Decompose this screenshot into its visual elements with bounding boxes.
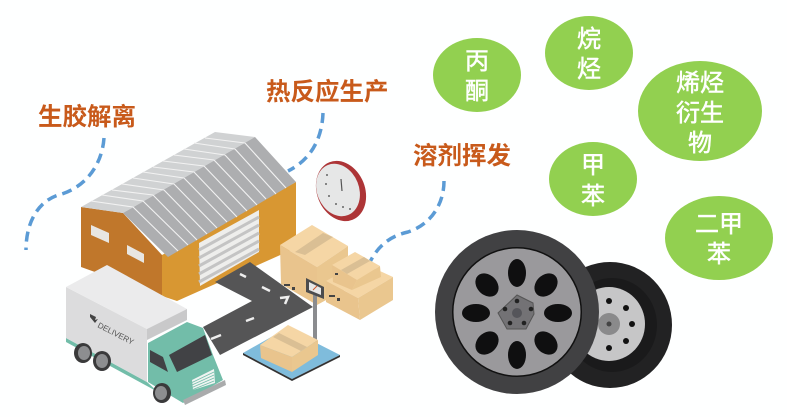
bubble: acetone: 丙	[465, 48, 489, 75]
lower right box	[326, 262, 393, 320]
bubble: olefin derivatives: 烯烃	[676, 70, 724, 97]
bubble: xylene: 二甲	[695, 211, 743, 238]
dashed arrow: solvent evaporation	[370, 181, 444, 262]
bubble: toluene: 甲	[581, 152, 605, 179]
bubble: olefin derivatives	[638, 61, 762, 161]
warehouse side roof	[81, 132, 255, 213]
platform scale	[243, 278, 340, 381]
bubble: xylene: 苯	[707, 241, 731, 268]
bubble: alkanes	[545, 16, 633, 90]
wall clock	[307, 153, 375, 229]
truck wheels	[74, 343, 171, 403]
warehouse roller door	[199, 210, 259, 286]
truck grille	[192, 369, 215, 390]
stacked cardboard boxes	[280, 225, 393, 320]
label: thermal reaction production: 热反应生产	[266, 77, 388, 106]
road	[203, 262, 313, 355]
warehouse left wall	[81, 207, 162, 296]
warehouse right wall	[162, 182, 296, 301]
bubble: alkanes: 烃	[577, 56, 601, 83]
label: rubber dissociation: 生胶解离	[38, 103, 136, 131]
truck side window	[150, 350, 168, 372]
truck cab	[148, 322, 226, 405]
delivery truck	[66, 265, 226, 405]
scale platform	[243, 328, 340, 379]
warehouse front roof	[123, 137, 296, 257]
truck windshield	[169, 335, 212, 372]
label: solvent evaporation: 溶剂挥发	[413, 142, 511, 170]
small top box	[332, 252, 381, 290]
bubble: olefin derivatives: 物	[688, 130, 712, 157]
bubble: toluene	[549, 142, 637, 216]
bubble: xylene	[665, 196, 773, 280]
dashed arrow: rubber dissociation	[26, 138, 104, 250]
warehouse window 1	[91, 225, 109, 243]
truck chassis	[66, 338, 158, 392]
dashed arrow: thermal reaction	[288, 113, 323, 171]
truck bumper	[183, 380, 226, 405]
scale pole	[313, 295, 317, 343]
bubble: toluene: 苯	[581, 183, 605, 210]
warehouse	[81, 132, 296, 301]
truck box side	[66, 287, 147, 382]
scale display	[306, 278, 324, 299]
delivery logo	[90, 314, 98, 323]
bubble: acetone: 酮	[465, 78, 489, 105]
truck box end	[147, 309, 187, 340]
small tire	[548, 262, 672, 388]
warehouse window 2	[127, 245, 144, 263]
large box	[280, 225, 348, 305]
box on scale	[260, 325, 318, 372]
delivery text: DELIVERY	[96, 321, 136, 347]
bubble: acetone	[433, 38, 521, 112]
bubble: olefin derivatives: 衍生	[676, 100, 724, 127]
bubble: alkanes: 烷	[577, 26, 601, 53]
truck box top	[66, 265, 187, 329]
large tire	[435, 230, 599, 394]
